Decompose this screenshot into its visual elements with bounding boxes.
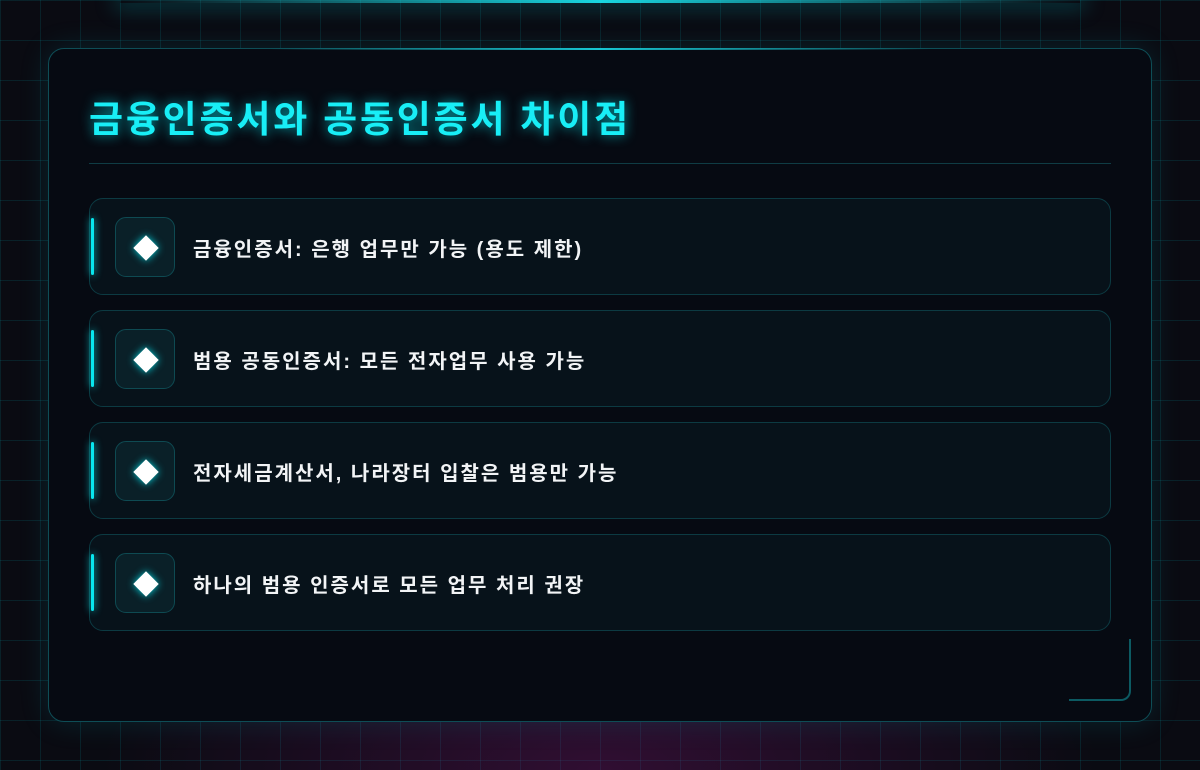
item 4 — [89, 534, 1111, 631]
icon: diamond — [115, 553, 175, 613]
icon: diamond — [115, 329, 175, 389]
corner bracket — [1069, 639, 1131, 701]
text: 하나의 범용 인증서로 모든 업무 처리 권장 — [193, 575, 585, 597]
icon: diamond — [115, 217, 175, 277]
text: 금융인증서: 은행 업무만 가능 (용도 제한) — [193, 239, 583, 261]
item 1 — [89, 198, 1111, 295]
text: 전자세금계산서, 나라장터 입찰은 범용만 가능 — [193, 463, 618, 485]
title: 금융인증서와 공동인증서 차이점 — [89, 99, 631, 140]
item 3 — [89, 422, 1111, 519]
text: 범용 공동인증서: 모든 전자업무 사용 가능 — [193, 351, 586, 373]
icon: diamond — [115, 441, 175, 501]
item 2 — [89, 310, 1111, 407]
